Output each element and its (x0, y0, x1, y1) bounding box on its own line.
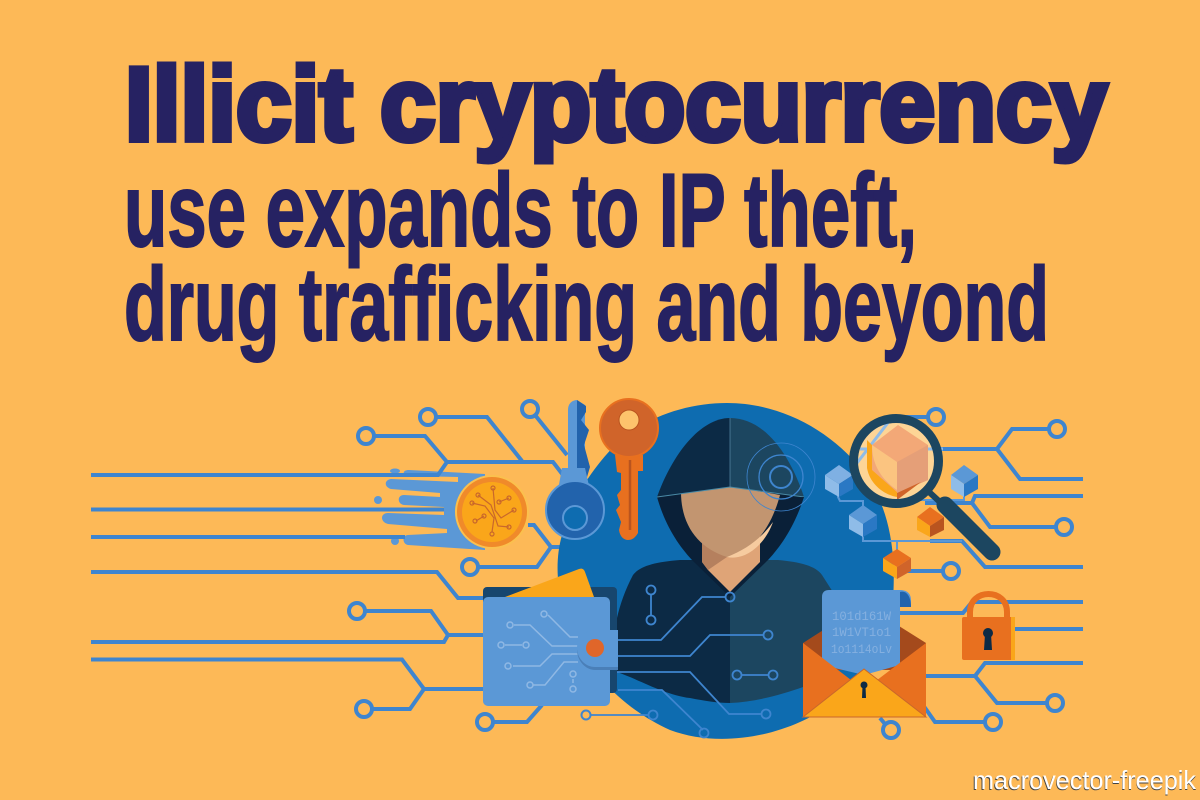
envelope with document (803, 590, 926, 717)
circuit lines right (880, 409, 1083, 738)
wallet card (505, 569, 594, 597)
body circuit (591, 586, 778, 738)
document code text: 1o1114oLv (831, 643, 892, 657)
small circle node (582, 710, 590, 720)
circuit lines left (91, 401, 567, 730)
document (822, 590, 911, 675)
title line 1: Illicit cryptocurrency (125, 47, 1107, 163)
crypto coin (455, 475, 529, 549)
title (124, 47, 1107, 363)
document code text: 1W1VT1o1 (832, 626, 891, 640)
document code text: 101d161W (832, 610, 891, 624)
credit: macrovector-freepik (972, 766, 1197, 796)
cube 5 (883, 549, 911, 579)
blue key (546, 400, 604, 539)
comet trail (374, 468, 485, 550)
signal rings (747, 443, 815, 511)
face (681, 486, 780, 557)
neck (702, 530, 760, 592)
cube 3 (951, 465, 978, 497)
wallet (483, 569, 618, 706)
cube 4 (917, 507, 944, 537)
credit: macrovector-freepik (973, 765, 1197, 795)
magnifying glass (853, 418, 992, 552)
cube 2 (849, 505, 877, 537)
hacker figure (591, 418, 838, 738)
orange key (600, 399, 658, 540)
cube connector lines (838, 490, 964, 552)
shoulders and torso (617, 560, 730, 703)
document code text (831, 610, 892, 657)
padlock (962, 594, 1015, 660)
wallet clasp (577, 632, 618, 670)
blue circle backdrop (558, 403, 894, 739)
cubes (825, 465, 978, 579)
cube 1 (825, 465, 853, 497)
hood lower (657, 485, 804, 597)
hood upper (657, 418, 730, 497)
